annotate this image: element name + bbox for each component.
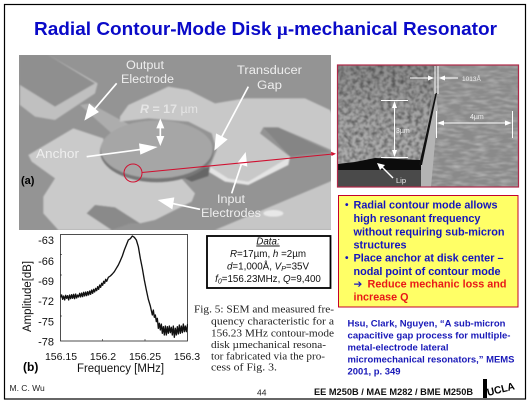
data text: =35V	[286, 262, 309, 272]
bullet text: anchor: nodal point of contour mode	[354, 266, 500, 278]
label: Output Electrode: Output	[126, 60, 165, 72]
data text	[215, 236, 321, 286]
box outline	[207, 236, 330, 288]
bullet text: contour mode: •	[345, 200, 349, 211]
citation	[348, 319, 514, 376]
zoomed SEM image	[337, 65, 518, 187]
panel: frequency chart (b)	[22, 234, 200, 375]
white arrows	[84, 83, 248, 209]
x axis tick labels	[45, 351, 200, 363]
dimension: 4 um	[436, 111, 512, 138]
footer: author: M. C. Wu	[10, 383, 45, 393]
SEM image	[19, 55, 335, 230]
dimension: 4 um: 4µm	[470, 114, 484, 121]
label: Input Electrodes: Electrodes	[201, 208, 261, 220]
bullet text: contour mode: structures	[354, 239, 406, 251]
label: Transducer Gap	[237, 65, 302, 92]
figure caption: cess of Fig. 3.	[211, 362, 277, 374]
figure caption: quency characteristic for a	[211, 316, 335, 328]
data text: =156.23MHz,	[222, 274, 283, 285]
bullet text: anchor	[345, 253, 504, 278]
arrow: transducer gap	[214, 87, 248, 151]
panel: SEM micrograph (a)	[19, 55, 335, 230]
y axis title: Amplitude[dB]	[22, 261, 34, 332]
label: Anchor: Anchor	[36, 147, 79, 161]
bullet text: contour mode: without requiring sub-micron	[353, 227, 505, 239]
citation: metal-electrode lateral	[348, 342, 448, 352]
red zoom indicator	[124, 152, 336, 182]
figure caption: tor fabricated via the pro-	[211, 352, 325, 362]
label: (a): (a)	[21, 175, 35, 187]
dimension: 1013 angstrom	[410, 66, 481, 94]
figure caption: Fig. 5: SEM and measured fre-	[194, 304, 334, 316]
tick marks	[60, 254, 145, 341]
data text: Q=9,400	[283, 274, 321, 285]
label: Transducer Gap: Transducer	[237, 65, 302, 77]
data text: 0	[218, 278, 222, 286]
arrow: anchor	[87, 143, 158, 157]
logo: UCLA: UCLA	[486, 380, 516, 399]
label: Output Electrode	[121, 60, 174, 86]
data text: P	[281, 266, 286, 273]
callout: Lip: Lip	[396, 176, 406, 185]
plot area	[60, 234, 188, 341]
title: Radial Contour-Mode Disk µ-mechanical Resonator	[34, 19, 497, 39]
y axis tick labels: -63	[38, 235, 54, 247]
label: Output Electrode: Electrode	[121, 74, 174, 86]
dimension: 1013 angstrom: 1013Å	[462, 74, 481, 83]
data box	[207, 236, 330, 288]
x axis tick labels: 156.2	[90, 351, 116, 363]
x axis title: Frequency [MHz]	[77, 363, 164, 375]
y axis tick labels: -78	[38, 336, 54, 348]
arrow: radius double-headed	[156, 118, 164, 146]
label: (b): (b)	[23, 360, 38, 374]
bullet text: contour mode	[345, 200, 505, 251]
data text: Data:	[256, 236, 280, 248]
y axis tick labels: -72	[38, 296, 54, 308]
figure caption: disk µmechanical resona-	[211, 340, 326, 351]
x axis tick labels: 156.25	[129, 351, 161, 363]
measured response curve	[61, 236, 188, 337]
dimension: 3 um	[381, 100, 410, 158]
circle marker	[124, 164, 142, 182]
y axis tick labels: -75	[38, 316, 54, 328]
callout: Lip	[377, 163, 406, 185]
y axis tick labels: -66	[38, 256, 54, 268]
zoom frame	[338, 65, 518, 187]
label: Input Electrodes: Input	[217, 194, 246, 206]
data text: f	[215, 274, 219, 285]
bullet text: anchor: Place anchor at disk center –	[354, 253, 504, 265]
footer: course: EE M250B / MAE M282 / BME M250B	[314, 387, 473, 397]
x axis tick labels: 156.15	[45, 351, 77, 363]
dimension: 3 um: 3µm	[396, 128, 410, 135]
result text: ➔	[354, 279, 362, 291]
arrow: input electrode left	[158, 197, 200, 209]
result text: increase Q	[354, 292, 409, 304]
bullet text: anchor: •	[345, 253, 349, 264]
figure caption: 156.23 MHz contour-mode	[211, 328, 335, 340]
data text: R=17µm, h =2µm	[230, 249, 306, 260]
citation: 2001, p. 349	[348, 366, 400, 376]
result text: Reduce mechanic loss and	[368, 279, 507, 291]
y axis tick labels	[38, 235, 54, 348]
bullet text: contour mode: high resonant frequency	[354, 213, 481, 225]
x axis tick labels: 156.3	[174, 351, 200, 363]
figure caption	[194, 304, 335, 374]
callout box	[338, 196, 518, 307]
result text	[354, 279, 507, 304]
panel: magnified SEM of gap	[337, 65, 518, 187]
callout: yellow key points	[338, 196, 518, 307]
label: Transducer Gap: Gap	[257, 80, 282, 92]
footer: page number: 44	[257, 388, 267, 398]
label: R = 17 um: R = 17 µm	[140, 104, 198, 116]
citation: capacitive gap process for multiple-	[348, 331, 510, 341]
bullet text: contour mode: Radial contour mode allows	[354, 200, 498, 212]
label: Input Electrodes	[201, 194, 261, 220]
citation: Hsu, Clark, Nguyen, “A sub-micron	[348, 319, 506, 329]
arrow: output electrode	[84, 83, 117, 121]
y axis tick labels: -69	[38, 276, 54, 288]
citation: micromechanical resonators,” MEMS	[348, 354, 514, 364]
arrow: input electrode up	[232, 152, 247, 193]
data text: d=1,000Å, V	[227, 262, 281, 272]
arrow to magnified view	[142, 152, 336, 172]
